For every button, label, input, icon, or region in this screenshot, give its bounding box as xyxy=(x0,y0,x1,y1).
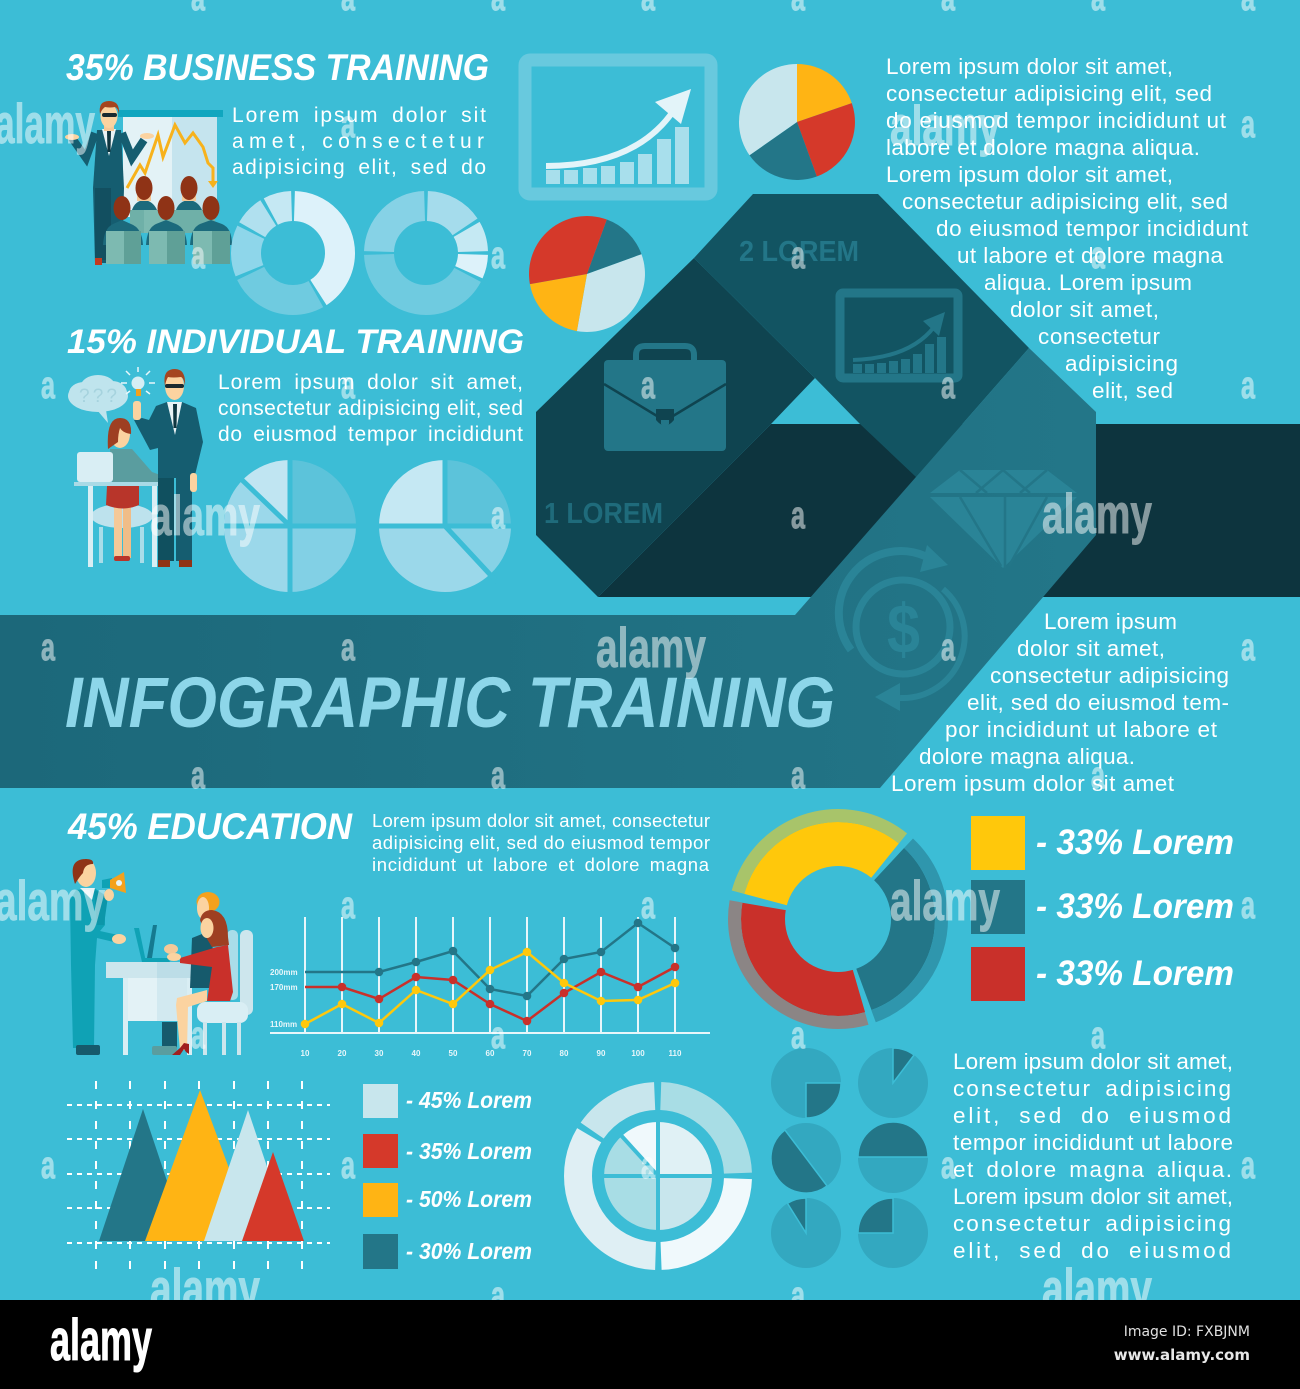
watermarks: a xyxy=(1241,627,1256,669)
label: 2 lorem: 2 LOREM xyxy=(739,236,859,268)
label: 1 lorem: 1 LOREM xyxy=(544,498,663,530)
text: bottom right paragraph: Lorem ipsum dolor sit amet, xyxy=(953,1184,1233,1209)
text: bottom right paragraph: elit, sed do eiusmod xyxy=(953,1238,1231,1263)
pie chart: individual 2 xyxy=(375,456,515,592)
text: top right staircase paragraph: adipisicing xyxy=(1065,351,1178,376)
text: middle right staircase paragraph xyxy=(891,609,1229,796)
text: middle right staircase paragraph: Lorem ipsum dolor sit amet xyxy=(891,771,1175,796)
legend: triangle chart: - 50% Lorem xyxy=(406,1186,532,1212)
text: middle right staircase paragraph: por incididunt ut labore et xyxy=(945,717,1218,742)
text: top right staircase paragraph: consectetur adipisicing elit, sed xyxy=(902,189,1228,214)
seated woman xyxy=(106,418,166,561)
small pie 4 xyxy=(858,1122,928,1193)
watermarks: a xyxy=(1241,1145,1256,1187)
legend: three segment donut: - 33% Lorem xyxy=(1036,954,1234,993)
panel: knot ribbon graphic xyxy=(0,194,1300,788)
watermarks: a xyxy=(791,1275,806,1317)
ribbon: left fold xyxy=(536,258,815,597)
watermarks: a xyxy=(791,495,806,537)
footer logo: alamy xyxy=(50,1308,152,1373)
concentric ring and pie chart xyxy=(578,1096,738,1256)
axis labels: 110mm xyxy=(270,1020,297,1029)
donut chart: business 2 xyxy=(379,206,473,300)
donut chart: three segment xyxy=(711,792,965,1046)
illustration: mentor and seated woman xyxy=(68,367,203,567)
axis labels: 100 xyxy=(631,1049,645,1058)
watermarks: a xyxy=(791,235,806,277)
text: top right staircase paragraph: dolor sit amet, xyxy=(1010,297,1159,322)
text: top right staircase paragraph: Lorem ipsum dolor sit amet, xyxy=(886,54,1173,79)
axis labels: 20 xyxy=(338,1049,347,1058)
pie chart: individual 1 xyxy=(220,456,360,596)
icon: presentation screen with growth arrow xyxy=(525,60,711,194)
text: bottom right paragraph: tempor incididunt ut labore xyxy=(953,1130,1233,1155)
watermarks: alamy xyxy=(890,869,1000,932)
axis labels xyxy=(270,968,682,1058)
text: top right staircase paragraph xyxy=(886,54,1249,403)
footer url: www.alamy.com xyxy=(1114,1346,1250,1364)
watermarks: a xyxy=(641,1145,656,1187)
legend: triangle chart xyxy=(363,1084,532,1269)
heading: education: 45% EDUCATION xyxy=(67,806,353,847)
text: bottom right paragraph: consectetur adipisicing xyxy=(953,1211,1231,1236)
legend: triangle chart: - 35% Lorem xyxy=(406,1138,532,1164)
watermarks: a xyxy=(191,1015,206,1057)
axis labels: 50 xyxy=(449,1049,458,1058)
watermarks: alamy xyxy=(890,94,1000,157)
watermarks: a xyxy=(41,365,56,407)
text: top right staircase paragraph: elit, sed xyxy=(1092,378,1173,403)
audience xyxy=(103,176,232,264)
donut chart: business 1 xyxy=(246,206,340,300)
text: bottom right paragraph: Lorem ipsum dolor sit amet, xyxy=(953,1049,1233,1074)
text: individual training body: consectetur adipisicing elit, sed xyxy=(218,397,523,420)
watermarks: a xyxy=(791,755,806,797)
axis labels: 80 xyxy=(560,1049,569,1058)
legend: three segment donut: - 33% Lorem xyxy=(1036,887,1234,926)
watermarks: a xyxy=(491,755,506,797)
text: business training body: Lorem ipsum dolor sit xyxy=(232,104,486,127)
legend: three segment donut xyxy=(971,816,1234,1001)
series: red xyxy=(305,963,679,1025)
text: business training body: amet, consectetur xyxy=(232,130,484,153)
small pie 3 xyxy=(771,1123,841,1193)
text: top right staircase paragraph: labore et dolore magna aliqua. xyxy=(886,135,1200,160)
axis labels: 200mm xyxy=(270,968,298,977)
presenter xyxy=(65,101,154,265)
small pie 6 xyxy=(858,1198,928,1268)
series: yellow xyxy=(301,948,679,1028)
heading: business training: 35% BUSINESS TRAINING xyxy=(66,47,489,88)
watermarks: a xyxy=(791,1015,806,1057)
text: education body: Lorem ipsum dolor sit amet, consectetur xyxy=(372,810,710,831)
watermarks: a xyxy=(1091,755,1106,797)
text: education body xyxy=(372,810,710,875)
text: middle right staircase paragraph: consectetur adipisicing xyxy=(990,663,1229,688)
watermarks: a xyxy=(941,1145,956,1187)
footer bar xyxy=(0,1300,1300,1389)
watermarks: a xyxy=(1241,365,1256,407)
watermarks: a xyxy=(41,1145,56,1187)
watermarks: a xyxy=(491,495,506,537)
icon: dollar with circular arrows: $ xyxy=(887,590,920,668)
legend: triangle chart: - 45% Lorem xyxy=(406,1087,532,1113)
illustration: classroom with megaphone xyxy=(70,859,253,1055)
text: middle right staircase paragraph: dolor sit amet, xyxy=(1017,636,1165,661)
thought bubble: ??? xyxy=(79,386,117,407)
watermarks: a xyxy=(1091,1015,1106,1057)
watermarks: a xyxy=(1241,104,1256,146)
small pie 5 xyxy=(771,1198,841,1268)
text: individual training body xyxy=(218,371,523,446)
presentation board xyxy=(118,110,223,217)
axis labels: 110 xyxy=(669,1049,682,1058)
text: individual training body: Lorem ipsum dolor sit amet, xyxy=(218,371,523,394)
watermarks: a xyxy=(941,365,956,407)
watermarks: a xyxy=(941,627,956,669)
line chart xyxy=(270,917,710,1058)
ribbon: top fold xyxy=(694,194,1029,477)
watermarks: a xyxy=(341,627,356,669)
watermarks: alamy xyxy=(150,1257,260,1320)
series: teal xyxy=(305,919,679,1000)
small pie 1 xyxy=(771,1048,841,1118)
text: individual training body: do eiusmod tempor incididunt xyxy=(218,423,523,446)
icon: growth chart screen xyxy=(840,293,958,378)
text: top right staircase paragraph: do eiusmod tempor incididunt xyxy=(936,216,1249,241)
icon: briefcase xyxy=(604,346,726,451)
desk and laptop xyxy=(106,925,209,1055)
watermarks: alamy xyxy=(596,616,706,679)
triangle chart xyxy=(67,1081,330,1269)
legend: three segment donut: - 33% Lorem xyxy=(1036,823,1234,862)
text: middle right staircase paragraph: Lorem ipsum xyxy=(1044,609,1177,634)
text: middle right staircase paragraph: elit, sed do eiusmod tem- xyxy=(967,690,1229,715)
text: bottom right paragraph: et dolore magna aliqua. xyxy=(953,1157,1232,1182)
pie chart: top coloured xyxy=(739,64,855,180)
small pie charts grid xyxy=(771,1048,928,1268)
title banner text: INFOGRAPHIC TRAINING xyxy=(65,664,835,743)
standing mentor xyxy=(133,369,203,567)
watermarks: alamy xyxy=(150,484,260,547)
text: top right staircase paragraph: consectetur adipisicing elit, sed xyxy=(886,81,1212,106)
watermarks: a xyxy=(41,627,56,669)
text: education body: adipisicing elit, sed do eiusmod tempor xyxy=(372,832,710,853)
watermarks: a xyxy=(641,365,656,407)
small pie 2 xyxy=(858,1048,928,1118)
icon: dollar with circular arrows xyxy=(839,545,965,711)
ribbon: title band and diagonal xyxy=(0,348,1096,788)
axis labels: 10 xyxy=(301,1049,310,1058)
watermarks: a xyxy=(1241,885,1256,927)
watermarks: a xyxy=(1091,235,1106,277)
text: top right staircase paragraph: ut labore et dolore magna xyxy=(957,243,1223,268)
watermarks: a xyxy=(491,1015,506,1057)
desk, laptop and chair xyxy=(91,504,153,563)
seated colleagues and chair xyxy=(152,892,253,1055)
footer image id: Image ID: FXBJNM xyxy=(1124,1324,1250,1340)
watermarks: alamy xyxy=(1042,1257,1152,1320)
axis labels: 70 xyxy=(523,1049,532,1058)
watermarks: a xyxy=(341,104,356,146)
text: bottom right paragraph: elit, sed do eiusmod xyxy=(953,1103,1231,1128)
watermarks: a xyxy=(341,1145,356,1187)
watermarks: a xyxy=(641,885,656,927)
light bulb xyxy=(121,367,155,396)
axis labels: 170mm xyxy=(270,983,298,992)
watermarks: a xyxy=(341,885,356,927)
megaphone xyxy=(102,872,126,893)
text: top right staircase paragraph: aliqua. Lorem ipsum xyxy=(984,270,1192,295)
text: business training body xyxy=(232,104,486,179)
watermarks: a xyxy=(491,235,506,277)
axis labels: 60 xyxy=(486,1049,495,1058)
heading: individual training: 15% INDIVIDUAL TRAINING xyxy=(67,323,524,361)
legend: triangle chart: - 30% Lorem xyxy=(406,1238,532,1264)
desk xyxy=(74,452,170,567)
axis labels: 30 xyxy=(375,1049,384,1058)
text: top right staircase paragraph: do eiusmod tempor incididunt ut xyxy=(886,108,1227,133)
text: bottom right paragraph: consectetur adipisicing xyxy=(953,1076,1231,1101)
teacher xyxy=(70,859,126,1055)
ribbon: darkest band xyxy=(598,424,1300,597)
axis labels: 40 xyxy=(412,1049,421,1058)
text: top right staircase paragraph: consectetur xyxy=(1038,324,1160,349)
watermarks: a xyxy=(191,235,206,277)
thought bubble xyxy=(68,375,128,423)
axis labels: 90 xyxy=(597,1049,606,1058)
watermarks: alamy xyxy=(1042,482,1152,545)
watermarks: a xyxy=(191,755,206,797)
watermarks: a xyxy=(491,1275,506,1317)
text: middle right staircase paragraph: dolore magna aliqua. xyxy=(919,744,1135,769)
grid xyxy=(270,917,710,1033)
text: business training body: adipisicing elit, sed do xyxy=(232,156,486,179)
watermarks: a xyxy=(341,365,356,407)
icon: diamond xyxy=(930,470,1077,568)
text: education body: incididunt ut labore et dolore magna xyxy=(372,854,710,875)
text: top right staircase paragraph: Lorem ipsum dolor sit amet, xyxy=(886,162,1173,187)
text: bottom right paragraph xyxy=(953,1049,1233,1263)
pie chart: middle coloured xyxy=(529,216,645,332)
illustration: presenter and audience xyxy=(65,101,232,265)
